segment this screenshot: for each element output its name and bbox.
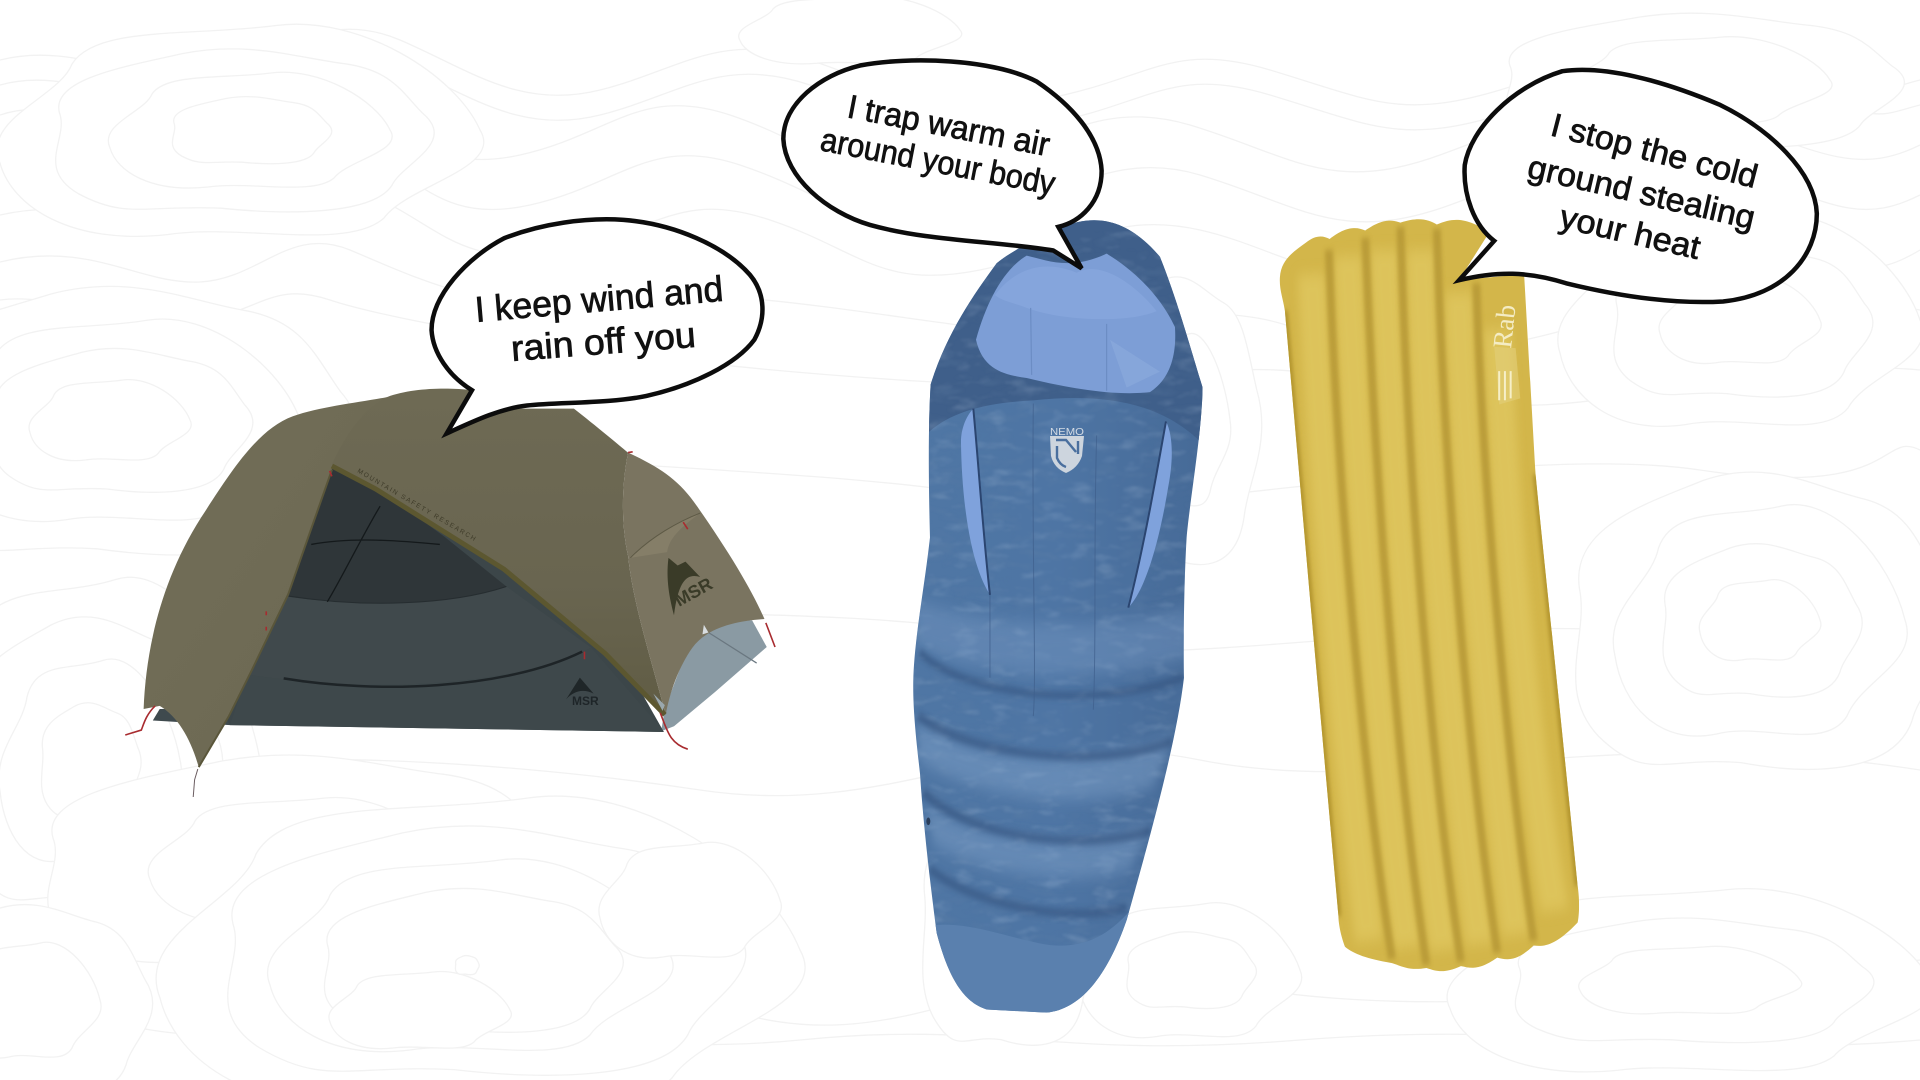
mat outer shading: [1285, 311, 1578, 916]
side vent: [630, 513, 700, 558]
bubble outline: [432, 219, 762, 433]
tent logo MSR: MSR: [671, 574, 716, 610]
speech bubble: tent: [432, 219, 762, 433]
bag body: [907, 206, 1207, 1022]
floor peak mark: [566, 678, 594, 699]
door binding: [332, 466, 665, 715]
main fly panel: [332, 389, 666, 715]
contours cluster top left: [0, 24, 484, 236]
bag logo NEMO: NEMO: [1050, 426, 1084, 438]
bubble text: I keep wind and: [473, 268, 725, 330]
dark upper shoulder: [929, 220, 1203, 440]
bubble text: I stop the cold: [1547, 106, 1762, 195]
bubble text: I trap warm air: [845, 88, 1053, 163]
bag shield emblem: [1050, 436, 1084, 473]
sleeping bag: [907, 206, 1207, 1022]
tube highlights: [1312, 250, 1555, 950]
vertical seams: [990, 404, 1097, 716]
speech bubble: mat: ground stealing: [1524, 148, 1759, 236]
bubble outline: [783, 60, 1102, 268]
hood: [976, 254, 1175, 393]
dark foot tie: [193, 769, 198, 797]
tube dividers: [1329, 227, 1534, 965]
baffle shadows: [920, 652, 1183, 696]
MSR peak mark: [668, 558, 700, 615]
wrinkle texture: [945, 392, 1114, 399]
speech bubble: sleeping bag: around your body: [818, 121, 1059, 202]
inner tent: [215, 460, 664, 732]
side stitch: [926, 817, 930, 825]
tent: [125, 389, 775, 797]
far left floor corner: [153, 709, 247, 725]
speech bubble: mat: your heat: [1556, 198, 1704, 266]
rear vestibule: [661, 620, 767, 731]
left arm slit: [961, 409, 989, 594]
tent floor logo MSR: MSR: [572, 694, 599, 708]
foot box: [936, 912, 1129, 1013]
mat logo Rab: Rab: [1487, 303, 1522, 350]
bubble outline: [1459, 70, 1817, 302]
illustration scene: three talking gear items: [125, 58, 1820, 1013]
mat label strip: [1494, 347, 1520, 404]
speech bubble: mat: [1459, 70, 1817, 302]
tent brand line: MOUNTAIN SAFETY RESEARCH: [356, 468, 478, 544]
baffle sheen: [917, 601, 1187, 674]
tent body: [125, 389, 775, 797]
left fly flap: [144, 397, 387, 767]
speech bubble: tent: rain off you: [509, 314, 697, 369]
speech bubble: sleeping bag: [783, 60, 1102, 268]
sleeping mat: [1275, 208, 1585, 983]
mat body: [1275, 208, 1585, 983]
red guy-lines and toggles: [125, 452, 775, 749]
right arm slit: [1128, 421, 1172, 608]
right fly panel: [623, 453, 764, 715]
